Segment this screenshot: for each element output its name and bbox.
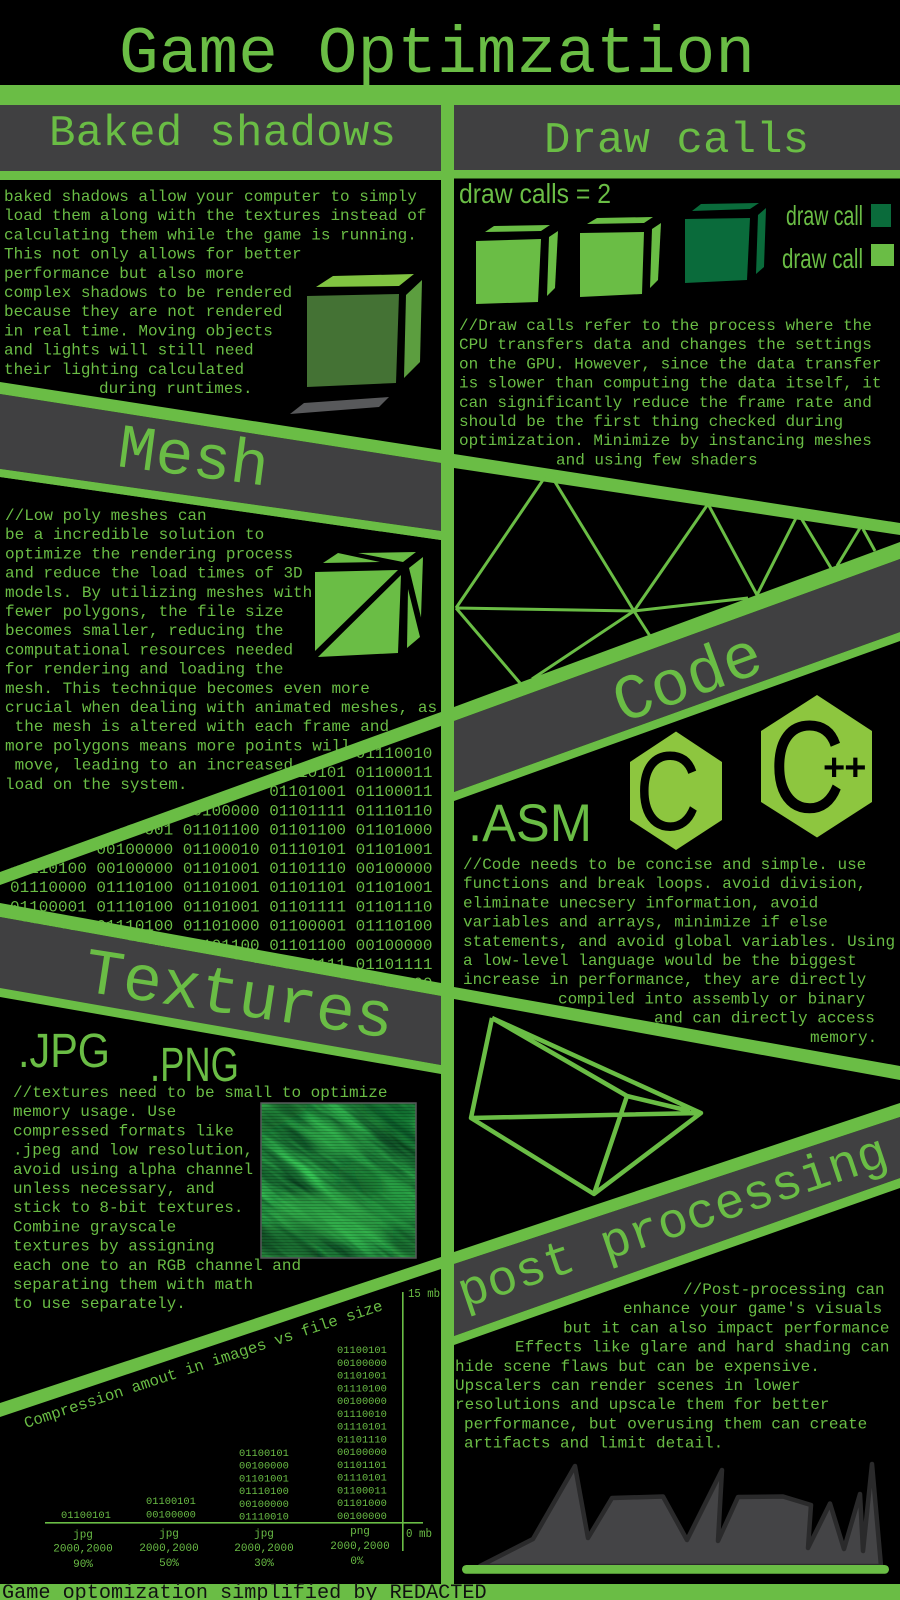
- binary background block: 01110100 00100000 01101001 01101110 00100000: [10, 860, 432, 878]
- text: draw calls body: should be the first thing checked during: [459, 413, 843, 431]
- text: code body: increase in performance, they are directly: [463, 971, 867, 989]
- binary bar: png 0%: 01101001: [337, 1370, 387, 1382]
- wireframe mesh: [456, 477, 875, 683]
- text: post processing body: resolutions and upscale them for better: [455, 1396, 829, 1414]
- binary background block: 01110100 01110100 01101000 01100001 01110100: [10, 918, 432, 936]
- text: textures body: to use separately.: [13, 1295, 186, 1313]
- legend: draw calls: draw call: [782, 243, 863, 274]
- image: green texture sample: [260, 1102, 417, 1259]
- text: baked shadows body: calculating them while the game is running.: [4, 226, 417, 244]
- binary background block: 01101001 01100011: [269, 783, 432, 801]
- text: baked shadows body: complex shadows to be rendered: [4, 284, 292, 302]
- text: mesh body: crucial when dealing with animated meshes, as: [5, 699, 437, 717]
- binary bar: png 0%: 00100000: [337, 1447, 387, 1459]
- binary bar: png 0%: [337, 1345, 387, 1523]
- wireframe envelope: [471, 1018, 701, 1194]
- strip under draw calls: [454, 454, 900, 535]
- text: mesh body: [5, 507, 437, 794]
- mask above diagonal: [0, 540, 441, 872]
- text: mesh body: and reduce the load times of 3D: [5, 565, 303, 583]
- category label: png 0%: 0%: [350, 1556, 364, 1568]
- category label: jpg 30%: jpg: [254, 1528, 274, 1540]
- text: baked shadows body: baked shadows allow your computer to simply: [4, 188, 417, 206]
- icon: C++ hexagon: [761, 695, 872, 841]
- labels: jpg and png formats: [18, 1025, 239, 1092]
- chart: compression vs file size: [22, 1288, 440, 1571]
- binary background block: 01110101 01100011: [269, 764, 432, 782]
- top divider bar: [0, 85, 900, 105]
- binary bar: jpg 30%: [239, 1448, 289, 1524]
- category label: jpg 30%: [234, 1528, 294, 1570]
- text: baked shadows body: in real time. Moving objects: [4, 322, 273, 340]
- binary bar: png 0%: 00100000: [337, 1358, 387, 1370]
- binary bar: png 0%: 01110100: [337, 1383, 387, 1395]
- category label: jpg 90%: jpg: [73, 1530, 93, 1542]
- band: textures heading: [0, 903, 441, 1074]
- title: Game Optimzation: [119, 17, 755, 92]
- binary bar: png 0%: 01101101: [337, 1460, 387, 1472]
- band: textures heading: Textures: [79, 938, 399, 1058]
- text: baked shadows body: [4, 188, 426, 398]
- text: mesh body: for rendering and loading the: [5, 661, 283, 679]
- text: mesh body: //Low poly meshes can: [5, 507, 207, 525]
- category label: jpg 50%: jpg: [159, 1528, 179, 1540]
- text: mesh body: the mesh is altered with each frame and: [15, 718, 389, 736]
- text: code body: memory.: [810, 1029, 877, 1047]
- legend: draw calls: [782, 200, 894, 274]
- text: mesh body: more polygons means more points will: [5, 737, 351, 755]
- text: code body: functions and break loops. avoid division,: [463, 875, 866, 893]
- text: code body: statements, and avoid global variables. Using: [463, 933, 895, 951]
- text: textures body: .jpeg and low resolution,: [13, 1142, 253, 1160]
- text: mesh body: becomes smaller, reducing the: [5, 622, 283, 640]
- binary bar: jpg 50%: 00100000: [146, 1510, 196, 1522]
- text: draw calls body: [459, 317, 881, 469]
- heading: draw calls: [454, 105, 900, 178]
- binary bar: jpg 30%: 01110010: [239, 1512, 289, 1524]
- text: code body: [463, 856, 895, 1047]
- text: baked shadows body: because they are not rendered: [4, 303, 282, 321]
- text: baked shadows body: performance but also more: [4, 265, 244, 283]
- text: baked shadows body: and lights will still need: [4, 342, 254, 360]
- binary bar: jpg 30%: 01100101: [239, 1448, 289, 1460]
- axis labels: 0 mb: [406, 1528, 432, 1541]
- text: draw calls body: on the GPU. However, since the data transfer: [459, 355, 881, 373]
- icon: baked shadow cube: [290, 274, 422, 414]
- category label: jpg 30%: 2000,2000: [234, 1543, 294, 1555]
- text: mesh body: models. By utilizing meshes with: [5, 584, 312, 602]
- band: code heading: [454, 542, 900, 801]
- band: mesh heading: [0, 382, 441, 540]
- text: post processing body: [455, 1281, 889, 1453]
- binary bar: png 0%: 01101110: [337, 1434, 387, 1446]
- category label: jpg 50%: 50%: [159, 1558, 179, 1570]
- binary background block: 01110010: [356, 745, 432, 763]
- text: textures body: memory usage. Use: [13, 1103, 176, 1121]
- binary background block: [10, 745, 432, 993]
- chart: performance graph: [462, 1464, 889, 1574]
- binary bar: png 0%: 01110101: [337, 1422, 387, 1434]
- text: textures body: //textures need to be small to optimize: [13, 1084, 387, 1102]
- binary background block: 00100000 01100010 01110101 01101001: [96, 841, 432, 859]
- text: code body: and can directly access: [654, 1010, 875, 1028]
- category label: jpg 90%: [53, 1530, 113, 1571]
- binary bar: png 0%: 01100011: [337, 1485, 387, 1497]
- legend: draw calls: draw call: [786, 200, 863, 231]
- text: textures body: [13, 1084, 387, 1313]
- heading: baked shadows: [0, 105, 441, 180]
- text: mesh body: load on the system.: [5, 776, 187, 794]
- text: textures body: compressed formats like: [13, 1122, 234, 1140]
- text: draw calls body: optimization. Minimize by instancing meshes: [459, 432, 872, 450]
- text: mesh body: move, leading to an increased: [15, 757, 293, 775]
- category label: jpg 50%: [139, 1528, 199, 1570]
- binary bar: jpg 30%: 01110100: [239, 1486, 289, 1498]
- text: code body: variables and arrays, minimize if else: [463, 914, 828, 932]
- text: draw calls body: CPU transfers data and changes the settings: [459, 336, 872, 354]
- labels: jpg and png formats: .JPG: [18, 1025, 110, 1078]
- text: baked shadows body: during runtimes.: [99, 380, 253, 398]
- text: code body: compiled into assembly or binary: [558, 990, 866, 1008]
- text: post processing body: performance, but overusing them can create: [464, 1415, 867, 1433]
- text: post processing body: Effects like glare and hard shading can: [515, 1339, 889, 1357]
- text: textures body: separating them with math: [13, 1276, 253, 1294]
- text: textures body: Combine grayscale: [13, 1218, 176, 1236]
- text: mesh body: fewer polygons, the file size: [5, 603, 283, 621]
- text: mesh body: mesh. This technique becomes even more: [5, 680, 370, 698]
- text: draw calls body: is slower than computing the data itself, it: [459, 375, 881, 393]
- binary bar: png 0%: 01100101: [337, 1345, 387, 1357]
- label: asm format: .ASM: [468, 794, 592, 853]
- binary bar: jpg 50%: [146, 1496, 196, 1522]
- binary bar: jpg 30%: 00100000: [239, 1461, 289, 1473]
- text: textures body: textures by assigning: [13, 1238, 215, 1256]
- binary background block: 01101111 01101111 01101111 01101111 01100000: [10, 975, 432, 993]
- text: textures body: unless necessary, and: [13, 1180, 215, 1198]
- divider strip: code to post processing: [454, 987, 900, 1080]
- labels: jpg and png formats: .PNG: [150, 1039, 239, 1092]
- chart title: Compression amout in images vs file size: [22, 1297, 385, 1433]
- binary bar: png 0%: 00100000: [337, 1511, 387, 1523]
- binary bar: png 0%: 01110010: [337, 1409, 387, 1421]
- text: mesh body: be a incredible solution to: [5, 526, 264, 544]
- chart axes: [45, 1292, 423, 1551]
- text: draw calls count: draw calls = 2: [459, 178, 611, 209]
- binary bar: jpg 50%: 01100101: [146, 1496, 196, 1508]
- band: post processing heading: post processing: [451, 1126, 896, 1323]
- text: baked shadows body: load them along with the textures instead of: [4, 207, 426, 225]
- text: post processing body: Upscalers can render scenes in lower: [455, 1377, 801, 1395]
- text: code body: a low-level language would be the biggest: [463, 952, 857, 970]
- text: post processing body: //Post-processing can: [683, 1281, 885, 1299]
- binary bar: jpg 30%: 00100000: [239, 1499, 289, 1511]
- binary background block: 00100000 01101111 01110110: [183, 802, 432, 820]
- icon: low poly cube: [315, 552, 423, 657]
- binary background block: 01100001 01101100 01101100 01101100 00100000: [10, 937, 432, 955]
- category label: png 0%: 2000,2000: [330, 1541, 390, 1553]
- band: code heading: Code: [604, 622, 773, 742]
- category label: jpg 90%: 90%: [73, 1559, 93, 1571]
- category label: png 0%: png: [350, 1526, 370, 1538]
- text: post processing body: hide scene flaws but can be expensive.: [455, 1358, 820, 1376]
- icon: C hexagon: C: [636, 730, 700, 854]
- text: draw calls body: //Draw calls refer to the process where the: [459, 317, 872, 335]
- axis labels: 15 mb: [408, 1288, 440, 1301]
- text: textures body: stick to 8-bit textures.: [13, 1199, 243, 1217]
- text: mesh body: optimize the rendering process: [5, 545, 293, 563]
- text: textures body: each one to an RGB channel and: [13, 1257, 301, 1275]
- category label: jpg 90%: 2000,2000: [53, 1544, 113, 1556]
- category label: png 0%: [330, 1526, 390, 1568]
- text: post processing body: enhance your game's visuals: [623, 1300, 882, 1318]
- heading: draw calls: Draw calls: [544, 116, 809, 166]
- icon: C++ hexagon: C: [769, 695, 845, 841]
- text: post processing body: artifacts and limit detail.: [464, 1435, 723, 1453]
- binary background block: 01100001 01110100 01101001 01101111 01101110: [10, 898, 432, 916]
- binary background block: 01100001 01101100 01101100 01101000: [96, 822, 432, 840]
- icon: C++ hexagon: ++: [823, 747, 865, 789]
- text: draw calls body: and using few shaders: [556, 451, 758, 469]
- divider strip: mesh to binary: [0, 712, 441, 885]
- text: draw calls body: can significantly reduce the frame rate and: [459, 394, 872, 412]
- band: mesh lower strip restored: [0, 469, 441, 540]
- binary bar: png 0%: 01110101: [337, 1472, 387, 1484]
- binary bar: jpg 30%: 01101001: [239, 1473, 289, 1485]
- axis labels: [406, 1288, 440, 1541]
- text: post processing body: but it can also impact performance: [563, 1319, 889, 1337]
- text: code body: //Code needs to be concise and simple. use: [463, 856, 866, 874]
- binary background block: 01110100 01101111 01101111 01101111 01101111: [10, 956, 432, 974]
- text: textures body: avoid using alpha channel: [13, 1161, 253, 1179]
- icon: draw call cubes: [476, 203, 766, 304]
- center divider bar: [441, 105, 454, 1584]
- band: mesh heading: Mesh: [114, 414, 273, 505]
- divider strip: textures to chart: [0, 1257, 441, 1417]
- text: code body: eliminate unecsery information, avoid: [463, 894, 818, 912]
- binary bar: jpg 90%: 01100101: [61, 1510, 111, 1522]
- category label: jpg 30%: 30%: [254, 1558, 274, 1570]
- binary bar: png 0%: 00100000: [337, 1396, 387, 1408]
- category label: jpg 50%: 2000,2000: [139, 1543, 199, 1555]
- text: baked shadows body: This not only allows for better: [4, 246, 302, 264]
- text: baked shadows body: their lighting calculated: [4, 361, 244, 379]
- heading: baked shadows: Baked shadows: [49, 109, 396, 159]
- footer: [0, 1582, 900, 1600]
- text: mesh body: computational resources needed: [5, 641, 293, 659]
- binary bar: png 0%: 01101000: [337, 1498, 387, 1510]
- binary background block: 01110000 01110100 01101001 01101101 01101001: [10, 879, 432, 897]
